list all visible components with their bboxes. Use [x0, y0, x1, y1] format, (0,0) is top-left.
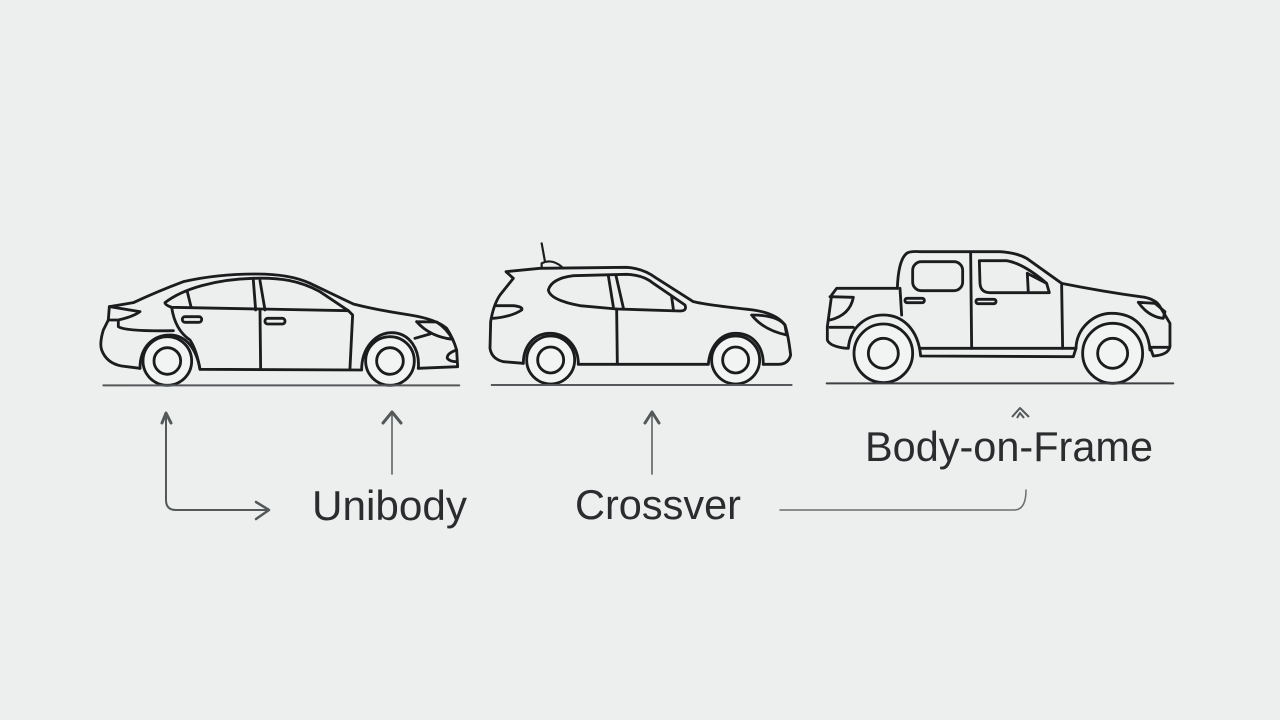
label: Crossver: Crossver — [575, 481, 741, 528]
crossover car illustration — [490, 243, 792, 385]
arrow: Crossover up arrow — [645, 412, 659, 474]
pickup truck illustration — [827, 252, 1173, 383]
arrow: L-shaped connector to Unibody — [162, 413, 269, 519]
label: Unibody: Unibody — [312, 482, 467, 529]
sedan car illustration — [101, 274, 459, 385]
arrow: Unibody up arrow — [383, 412, 401, 474]
label: Body-on-Frame: Body-on-Frame — [865, 423, 1153, 470]
arrow: small Body-on-Frame arrowhead — [1012, 408, 1029, 418]
arrow: connector from Crossover to Body-on-Frame — [780, 490, 1026, 510]
